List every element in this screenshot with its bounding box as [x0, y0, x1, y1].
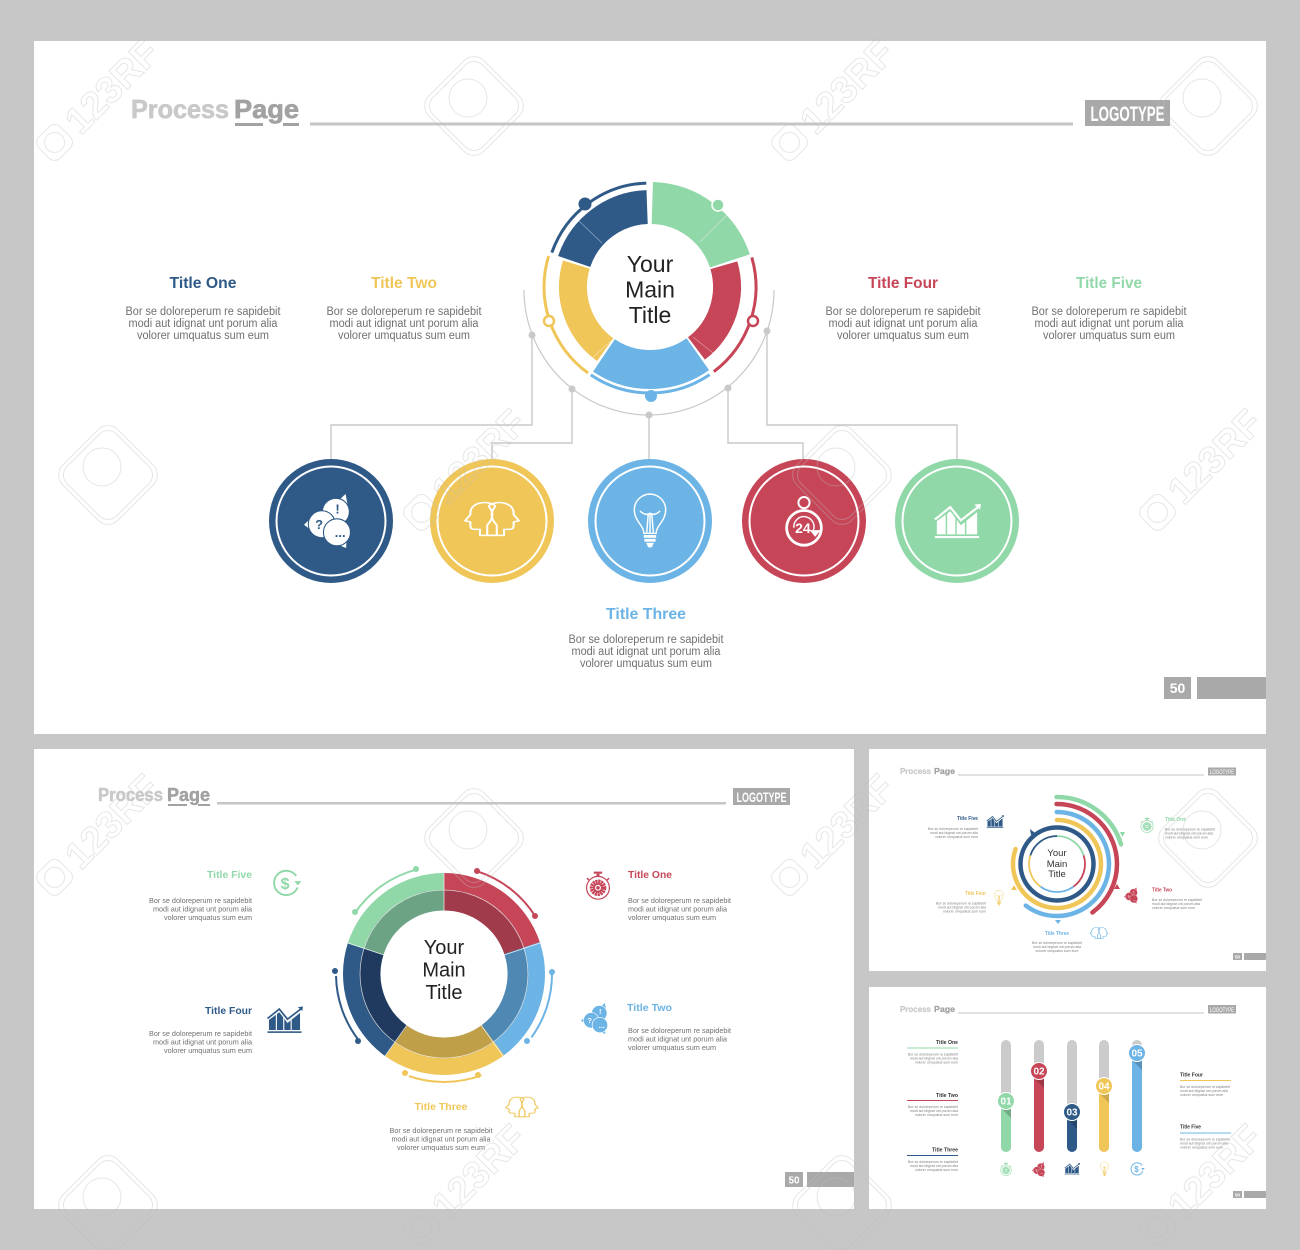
text block: Title Two	[907, 1093, 959, 1117]
text block: Title Three: Title Three	[414, 1101, 468, 1113]
text block: Title Four	[826, 275, 981, 342]
center label: Your Main Title: Main	[625, 276, 675, 302]
text block: Title Three: volorer umquatus sum eum	[580, 658, 712, 670]
text block: Title Two: Bor se doloreperum re sapidebit	[628, 1026, 732, 1035]
text block: Title One: Bor se doloreperum re sapidebit	[908, 1052, 959, 1056]
header: Process Page: Process	[131, 94, 229, 124]
text block: Title Four	[936, 891, 987, 914]
center label: Your Main Title: Title	[1048, 869, 1066, 880]
text block: Title Two: volorer umquatus sum eum	[338, 330, 470, 342]
text block: Title Five	[928, 816, 979, 839]
text block: Title Four: Bor se doloreperum re sapidebit	[1180, 1085, 1231, 1089]
header: Process Page: Page	[934, 1004, 955, 1014]
stock-image watermark overlay: 123RF	[792, 32, 903, 142]
panel: bottom-right slide	[869, 987, 1266, 1209]
text block: Title Two: modi aut idignat unt porum alia	[910, 1109, 959, 1113]
icon: chart	[267, 1006, 303, 1033]
header: Process Page: Process	[900, 1004, 931, 1014]
text block: Title Three: volorer umquatus sum eum	[915, 1168, 958, 1172]
center label: Your Main Title: Your	[627, 251, 674, 277]
text block: Title Five: volorer umquatus sum eum	[1180, 1146, 1223, 1150]
bar 04: 04	[1098, 1082, 1110, 1092]
text block: Title Two: Title Two	[936, 1093, 958, 1099]
text block: Title Four: modi aut idignat unt porum alia	[938, 906, 987, 910]
page number 50	[785, 1172, 854, 1187]
bar 05	[1128, 1040, 1146, 1152]
panel: main slide	[34, 41, 1266, 734]
text block: Title One: volorer umquatus sum eum	[137, 330, 269, 342]
text block: Title Two: Bor se doloreperum re sapidebit	[326, 306, 482, 318]
center label: Your Main Title	[1047, 848, 1067, 880]
text block: Title Four	[1180, 1072, 1231, 1097]
bar 04	[1096, 1040, 1112, 1152]
connector lines	[331, 290, 957, 460]
text block: Title Three: Title Three	[932, 1148, 958, 1154]
icon circle: navy speech bubbles	[269, 459, 393, 583]
text block: Title Four: Title Four	[205, 1005, 252, 1017]
text block: Title Five: Title Five	[1180, 1124, 1201, 1130]
text block: Title Two: Title Two	[627, 1002, 672, 1014]
text block: Title Three: Title Three	[606, 606, 686, 623]
text block: Title One	[628, 869, 732, 922]
logotype badge: LOGOTYPE	[1090, 103, 1164, 126]
logotype badge	[1085, 100, 1170, 126]
stock-image watermark overlay: 123RF	[424, 1117, 535, 1227]
text block: Title Five: Title Five	[957, 816, 978, 822]
text block: Title Five	[1032, 275, 1187, 342]
text block: Title Five: volorer umquatus sum eum	[1043, 330, 1175, 342]
icon: light bulb	[995, 890, 1003, 906]
text block: Title One	[1165, 817, 1216, 840]
center label: Your Main Title: Title	[425, 982, 463, 1004]
text block: Title One: volorer umquatus sum eum	[915, 1060, 958, 1064]
header: Process Page: Process	[98, 785, 163, 805]
page number 50: 50	[788, 1176, 800, 1186]
icon: dollar cycle	[274, 871, 301, 895]
text block: Title Five: modi aut idignat unt porum alia	[1034, 318, 1184, 330]
text block: Title Four: modi aut idignat unt porum alia	[153, 1038, 253, 1046]
text block: Title Four: modi aut idignat unt porum alia	[828, 318, 978, 330]
text block: Title Five: modi aut idignat unt porum alia	[153, 904, 253, 914]
text block: Title Two: Bor se doloreperum re sapidebit	[908, 1105, 959, 1109]
text block: Title Five: volorer umquatus sum eum	[164, 913, 252, 922]
main slide background	[34, 41, 1266, 734]
text block: Title Five: volorer umquatus sum eum	[935, 835, 978, 839]
text block: Title Two: modi aut idignat unt porum alia	[330, 318, 479, 330]
text block: Title Two: modi aut idignat unt porum alia	[1152, 902, 1201, 906]
text block: Title Two	[326, 275, 482, 342]
text block: Title Three: Bor se doloreperum re sapidebit	[908, 1160, 959, 1164]
page number 50: 50	[1170, 680, 1185, 696]
stock-image watermark overlay: 123RF	[57, 767, 168, 877]
header: Process Page	[131, 94, 1073, 126]
icon: speech bubbles	[1032, 1162, 1045, 1177]
bottom-right slide background	[869, 987, 1266, 1209]
text block: Title Two: Bor se doloreperum re sapidebit	[1152, 898, 1203, 902]
center label: Your Main Title: Your	[1047, 848, 1067, 859]
text block: Title Four: volorer umquatus sum eum	[164, 1046, 252, 1055]
logotype badge: LOGOTYPE	[1210, 769, 1234, 776]
header: Process Page	[98, 785, 726, 806]
text block: Title Three: modi aut idignat unt porum alia	[1033, 945, 1082, 949]
text block: Title Four: Bor se doloreperum re sapidebit	[936, 902, 987, 906]
stock-image watermark overlay: 123RF	[57, 32, 168, 142]
center label: Your Main Title	[422, 937, 466, 1004]
text block: Title Three	[907, 1148, 959, 1172]
text block: Title Four: Title Four	[965, 891, 986, 897]
page number	[1233, 1191, 1266, 1198]
bar 01: 01	[1000, 1096, 1012, 1108]
page number 50	[1164, 677, 1266, 699]
text block: Title One: volorer umquatus sum eum	[1165, 836, 1208, 840]
bar 05: 05	[1131, 1048, 1143, 1060]
text block: Title Three: volorer umquatus sum eum	[397, 1143, 485, 1152]
bar 01	[998, 1040, 1014, 1152]
text block: Title Two: Title Two	[1152, 888, 1172, 894]
text block: Title Five	[149, 869, 253, 922]
page number	[1233, 953, 1266, 960]
slider bar chart	[998, 1040, 1146, 1152]
icon: gear stopwatch	[1001, 1163, 1011, 1176]
icon: speech bubbles	[581, 1003, 608, 1034]
text block: Title One: modi aut idignat unt porum alia	[1165, 832, 1214, 836]
text block: Title Five: modi aut idignat unt porum alia	[1180, 1142, 1229, 1146]
icon circle: green chart	[895, 459, 1019, 583]
text block: Title One: modi aut idignat unt porum alia	[910, 1056, 959, 1060]
bar 03	[1064, 1040, 1080, 1152]
icon circle: red stopwatch 24	[742, 459, 866, 583]
text block: Title Five: modi aut idignat unt porum alia	[930, 831, 979, 835]
icon: speech bubbles	[1124, 888, 1138, 904]
text block: Title Four: volorer umquatus sum eum	[943, 910, 986, 914]
stock-image watermark overlay: 123RF	[424, 402, 535, 512]
text block: Title Four: Bor se doloreperum re sapidebit	[149, 1029, 253, 1038]
text block: Title Three: Bor se doloreperum re sapidebit	[1032, 941, 1083, 945]
icon: two heads	[1090, 928, 1108, 938]
text block: Title One: modi aut idignat unt porum alia	[128, 318, 278, 330]
text block: Title Three: modi aut idignat unt porum alia	[910, 1164, 959, 1168]
header: Process Page	[900, 766, 1204, 776]
text block: Title One: Bor se doloreperum re sapidebit	[126, 306, 281, 318]
top-right slide background	[869, 749, 1266, 971]
center label: Your Main Title: Title	[629, 302, 671, 328]
stock-image watermark overlay: 123RF	[1160, 402, 1271, 512]
icon: light bulb	[1100, 1162, 1109, 1176]
text block: Title One: Bor se doloreperum re sapidebit	[1165, 828, 1216, 832]
text block: Title Five	[1180, 1124, 1231, 1150]
text block: Title Four: volorer umquatus sum eum	[837, 330, 969, 342]
text block: Title Four: modi aut idignat unt porum alia	[1180, 1089, 1229, 1093]
stock-image watermark overlay: 123RF	[792, 767, 903, 877]
logotype badge	[1208, 1005, 1236, 1014]
text block: Title Five: Title Five	[1076, 275, 1142, 292]
text block: Title One	[907, 1040, 959, 1064]
text block: Title Four: Title Four	[868, 275, 938, 292]
text block: Title Four	[149, 1005, 253, 1055]
header: Process Page: Page	[167, 785, 210, 805]
center label: Your Main Title: Your	[424, 937, 465, 959]
center label: Your Main Title	[625, 251, 675, 328]
text block: Title Two: Title Two	[371, 275, 437, 292]
header: Process Page: Page	[234, 94, 299, 124]
icon: chart	[987, 815, 1004, 828]
icon: gear stopwatch	[1141, 818, 1153, 833]
text block: Title One: Title One	[628, 869, 672, 881]
logotype badge: LOGOTYPE	[1210, 1007, 1234, 1014]
icon: dollar cycle	[1131, 1163, 1145, 1175]
text block: Title One	[126, 275, 281, 342]
text block: Title Five: Title Five	[207, 869, 252, 881]
text block: Title Three	[1032, 931, 1083, 953]
panel: top-right slide	[869, 749, 1266, 971]
stock-image watermark overlay: 123RF	[1160, 1117, 1271, 1227]
donut chart: two-tone segments	[292, 822, 596, 1126]
icon circle: blue light bulb	[588, 459, 712, 583]
text block: Title Five: Bor se doloreperum re sapidebit	[1180, 1138, 1231, 1142]
center label: Your Main Title: Main	[422, 960, 466, 982]
text block: Title Three	[568, 606, 724, 670]
text block: Title Two: volorer umquatus sum eum	[628, 1043, 716, 1052]
header: Process Page: Process	[900, 766, 931, 776]
icon circle: yellow two heads	[430, 459, 554, 583]
donut chart: five segments	[502, 139, 798, 435]
header: Process Page	[900, 1004, 1204, 1014]
icon: gear stopwatch	[587, 872, 609, 899]
icon: chart	[1065, 1163, 1080, 1174]
page number: 50	[1235, 1192, 1240, 1198]
text block: Title Five: Bor se doloreperum re sapidebit	[1032, 306, 1187, 318]
text block: Title Five: Bor se doloreperum re sapidebit	[149, 896, 253, 905]
text block: Title Three	[390, 1101, 493, 1152]
icon: two heads	[506, 1097, 538, 1117]
text block: Title One: modi aut idignat unt porum alia	[628, 904, 728, 914]
text block: Title Two	[627, 1002, 732, 1052]
text block: Title Five: Bor se doloreperum re sapidebit	[928, 827, 979, 831]
logotype badge	[733, 788, 790, 805]
page number: 50	[1235, 954, 1240, 960]
panel: bottom-left slide	[34, 749, 854, 1209]
logotype badge	[1208, 768, 1236, 776]
bar 02	[1030, 1040, 1048, 1152]
text block: Title Three: modi aut idignat unt porum alia	[572, 646, 721, 658]
text block: Title One: volorer umquatus sum eum	[628, 913, 716, 922]
text block: Title Three: Title Three	[1045, 931, 1069, 937]
text block: Title One: Bor se doloreperum re sapidebit	[628, 896, 732, 905]
header: Process Page: Page	[934, 766, 955, 776]
text block: Title Two: volorer umquatus sum eum	[1152, 906, 1195, 910]
text block: Title Three: modi aut idignat unt porum alia	[392, 1134, 491, 1144]
text block: Title Three: volorer umquatus sum eum	[1036, 949, 1078, 953]
text block: Title One: Title One	[936, 1040, 958, 1046]
text block: Title One: Title One	[170, 275, 237, 292]
text block: Title One: Title One	[1165, 817, 1186, 823]
text block: Title Three: Bor se doloreperum re sapidebit	[390, 1126, 493, 1135]
logotype badge: LOGOTYPE	[736, 789, 786, 805]
text block: Title Two	[1152, 888, 1203, 910]
bottom-left slide background	[34, 749, 854, 1209]
text block: Title Four: Title Four	[1180, 1072, 1203, 1078]
center label: Your Main Title: Main	[1047, 859, 1067, 870]
text block: Title Four: Bor se doloreperum re sapidebit	[826, 306, 981, 318]
text block: Title Three: Bor se doloreperum re sapidebit	[568, 634, 724, 646]
concentric progress rings	[990, 797, 1125, 931]
bar 03: 03	[1066, 1108, 1078, 1118]
text block: Title Two: modi aut idignat unt porum alia	[628, 1034, 728, 1044]
text block: Title Two: volorer umquatus sum eum	[915, 1113, 958, 1117]
bar 02: 02	[1033, 1066, 1045, 1078]
text block: Title Four: volorer umquatus sum eum	[1180, 1093, 1223, 1097]
